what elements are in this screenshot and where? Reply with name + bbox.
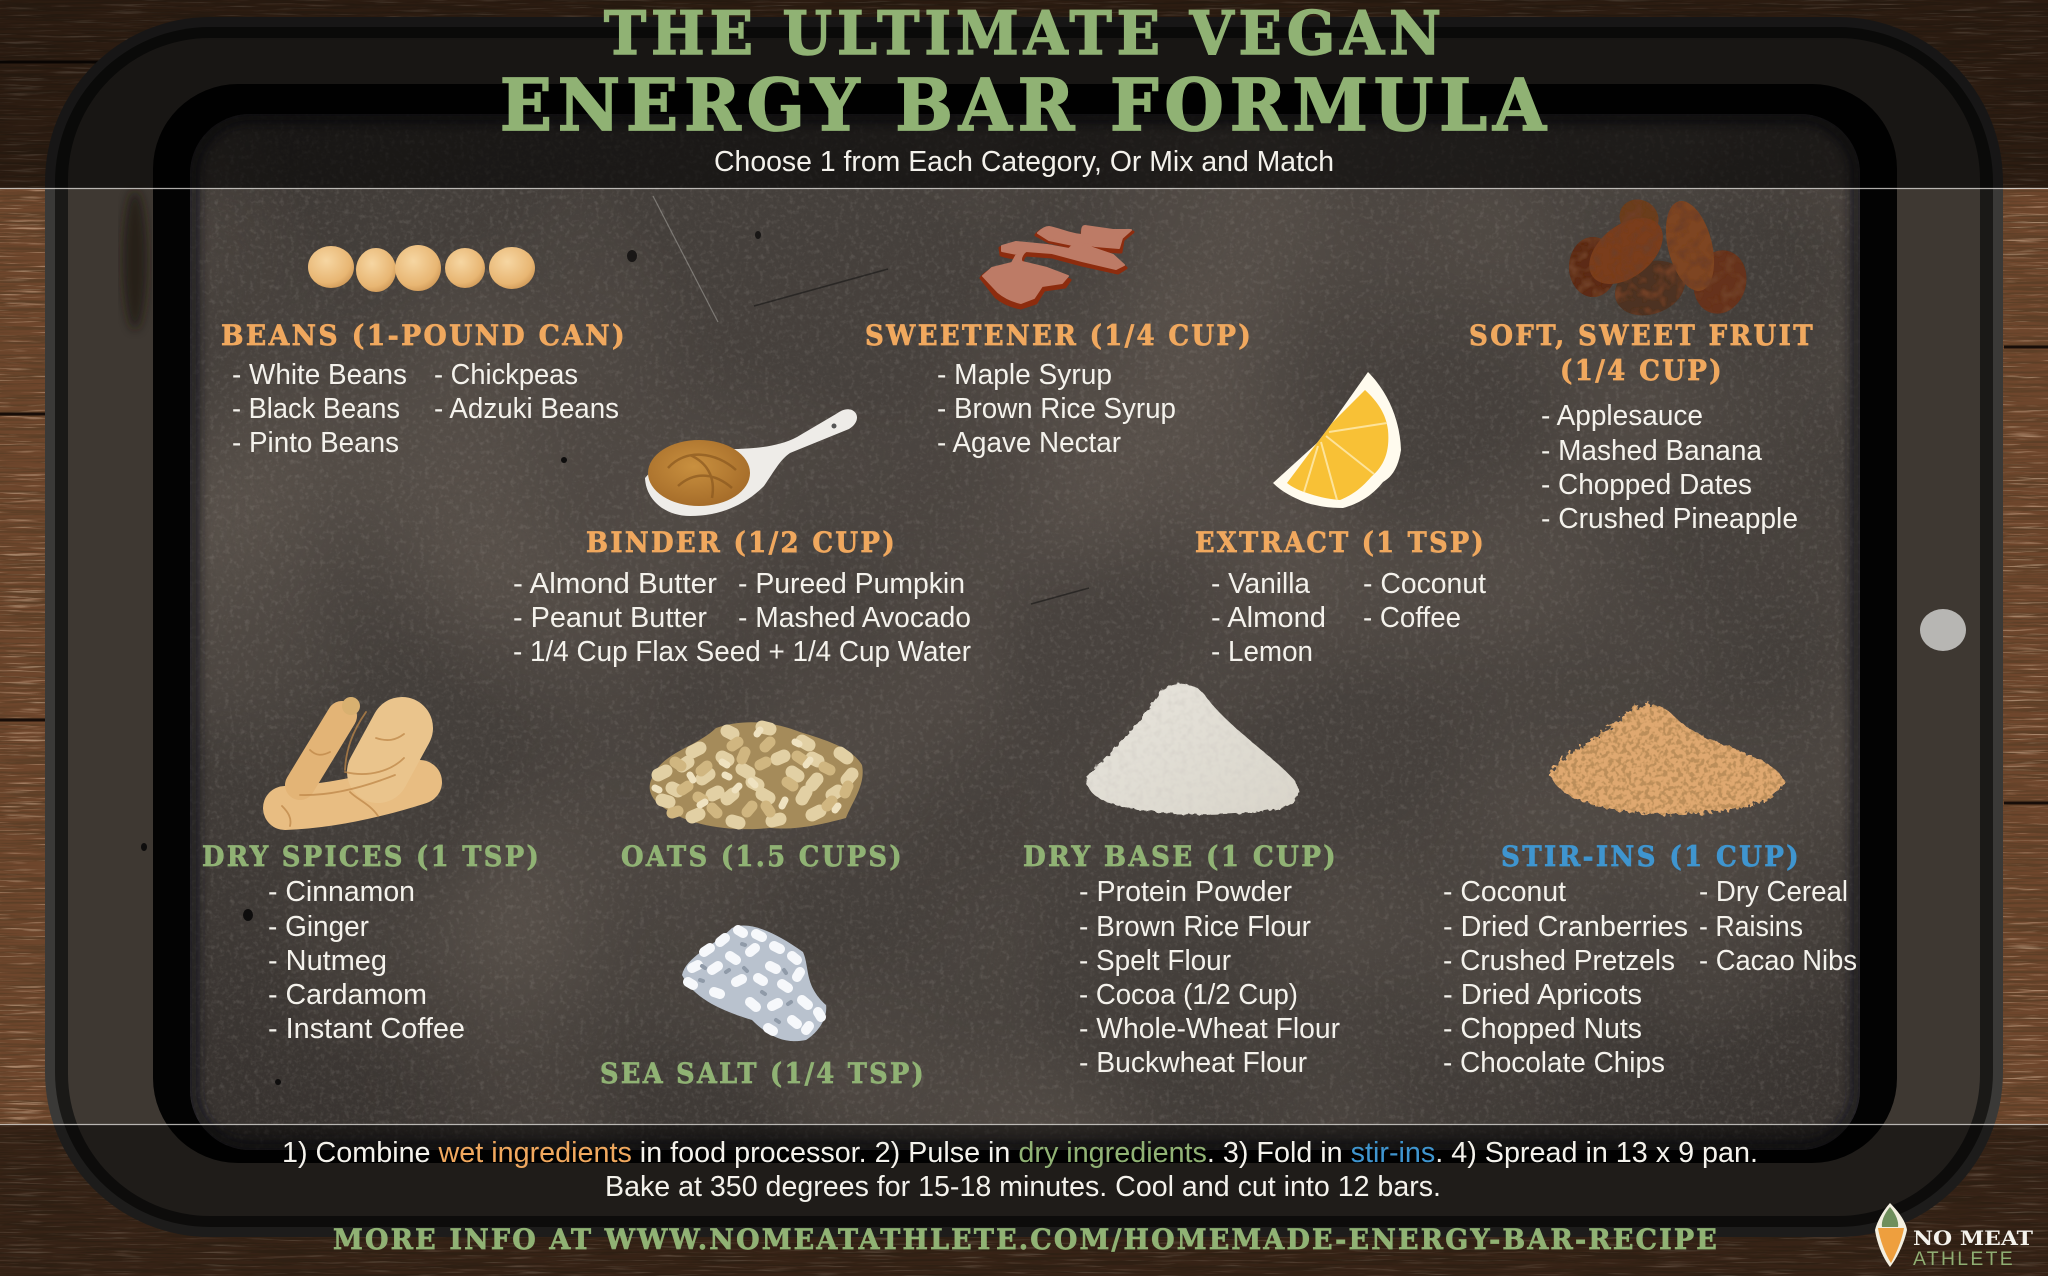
list: dry spices	[268, 876, 465, 1045]
list: dry base: - Brown Rice Flour	[1079, 911, 1311, 943]
list: dry spices: - Instant Coffee	[268, 1013, 465, 1045]
list: dry base: - Buckwheat Flour	[1079, 1047, 1307, 1079]
list: stir-ins: - Chopped Nuts	[1443, 1013, 1642, 1045]
list: stir-ins: - Coconut	[1443, 876, 1566, 908]
panel: sweetener	[865, 226, 1253, 459]
list: binder: - Mashed Avocado	[738, 602, 971, 634]
logo: No Meat Athlete: ATHLETE	[1913, 1249, 2015, 1270]
logo: No Meat Athlete: NO MEAT	[1913, 1226, 2033, 1250]
list: binder: - Pureed Pumpkin	[738, 568, 965, 600]
list: stir-ins: - Cacao Nibs	[1699, 945, 1857, 977]
list: soft sweet fruit: - Mashed Banana	[1541, 435, 1763, 467]
footer link: MORE INFO AT WWW.NOMEATATHLETE.COM/HOMEMADE-ENERGY-BAR-RECIPE	[333, 1223, 1719, 1256]
heading: soft sweet fruit	[1469, 319, 1815, 387]
icon: ginger root	[282, 697, 420, 826]
icon: crumbled pile	[1550, 705, 1784, 814]
list: soft sweet fruit	[1541, 400, 1798, 535]
list: binder: - Peanut Butter	[513, 602, 707, 634]
list: dry base: - Spelt Flour	[1079, 945, 1231, 977]
list: dry spices: - Ginger	[268, 911, 369, 943]
list: stir-ins	[1443, 876, 1857, 1079]
panel: dry spices	[202, 697, 541, 1045]
list: dry spices: - Cinnamon	[268, 876, 415, 908]
heading: extract: EXTRACT (1 TSP)	[1195, 526, 1486, 559]
heading: stir-ins: STIR-INS (1 CUP)	[1501, 840, 1801, 873]
heading: binder: BINDER (1/2 CUP)	[586, 526, 897, 559]
header band	[0, 0, 2048, 188]
logo: No Meat Athlete	[1875, 1203, 2033, 1270]
list: dry base: - Whole-Wheat Flour	[1079, 1013, 1340, 1045]
list: beans: - Black Beans	[232, 393, 400, 425]
subtitle: Choose 1 from Each Category, Or Mix and Match	[714, 146, 1334, 178]
list: stir-ins: - Dried Apricots	[1443, 979, 1642, 1011]
icon: flour pile	[1087, 683, 1298, 815]
list: sweetener	[937, 359, 1176, 459]
title: THE ULTIMATE VEGAN	[604, 0, 1446, 69]
heading: soft sweet fruit: (1/4 CUP)	[1560, 354, 1724, 387]
list: extract: - Coffee	[1363, 602, 1461, 634]
heading: sweetener: SWEETENER (1/4 CUP)	[865, 319, 1253, 352]
instructions: Bake at 350 degrees for 15-18 minutes. Cool and cut into 12 bars.	[605, 1171, 1441, 1203]
icon: tray hanging hole	[1920, 609, 1966, 651]
list: dry base: - Cocoa (1/2 Cup)	[1079, 979, 1298, 1011]
icon: chickpeas	[308, 245, 535, 292]
list: stir-ins: - Crushed Pretzels	[1443, 945, 1675, 977]
list: stir-ins: - Dried Cranberries	[1443, 911, 1688, 943]
heading: dry base: DRY BASE (1 CUP)	[1023, 840, 1338, 873]
heading: oats: OATS (1.5 CUPS)	[621, 840, 904, 873]
icon: dates	[1569, 192, 1753, 325]
title	[500, 0, 1552, 147]
panel: sea salt	[600, 925, 926, 1090]
icon: salt crystals	[682, 925, 826, 1041]
list: dry spices: - Cardamom	[268, 979, 427, 1011]
list: dry base: - Protein Powder	[1079, 876, 1292, 908]
list: dry spices: - Nutmeg	[268, 945, 387, 977]
list: sweetener: - Agave Nectar	[937, 427, 1121, 459]
icon: rolled oats	[650, 722, 863, 829]
footer band	[0, 1125, 2048, 1276]
list: beans: - Pinto Beans	[232, 427, 399, 459]
list: beans	[232, 359, 619, 459]
list: extract: - Almond	[1211, 602, 1326, 634]
heading: dry spices: DRY SPICES (1 TSP)	[202, 840, 541, 873]
list: stir-ins: - Chocolate Chips	[1443, 1047, 1665, 1079]
list: beans: - Adzuki Beans	[434, 393, 619, 425]
list: soft sweet fruit: - Crushed Pineapple	[1541, 503, 1798, 535]
list: soft sweet fruit: - Applesauce	[1541, 400, 1703, 432]
list: sweetener: - Brown Rice Syrup	[937, 393, 1176, 425]
list: stir-ins: - Dry Cereal	[1699, 876, 1848, 908]
panel: soft sweet fruit	[1469, 192, 1815, 535]
instructions	[282, 1137, 1758, 1203]
list: sweetener: - Maple Syrup	[937, 359, 1112, 391]
title: ENERGY BAR FORMULA	[500, 63, 1552, 147]
heading: beans: BEANS (1-POUND CAN)	[221, 319, 627, 352]
list: extract	[1211, 568, 1486, 668]
icon: lemon wedge	[1273, 372, 1401, 508]
heading: soft sweet fruit: SOFT, SWEET FRUIT	[1469, 319, 1815, 352]
icon: spoon of peanut butter	[645, 409, 857, 516]
list: binder: - 1/4 Cup Flax Seed + 1/4 Cup Water	[513, 636, 971, 668]
instructions: 1) Combine wet ingredients in food processor. 2) Pulse in dry ingredients. 3) Fold in stir-ins. 4) Spread in 13 x 9 pan.	[282, 1137, 1758, 1169]
panel: binder	[513, 409, 971, 668]
panel: stir-ins	[1443, 705, 1857, 1079]
list: soft sweet fruit: - Chopped Dates	[1541, 469, 1752, 501]
panel: oats	[621, 722, 904, 873]
panel: extract	[1195, 372, 1486, 668]
list: binder	[513, 568, 971, 668]
list: beans: - Chickpeas	[434, 359, 578, 391]
list: dry base	[1079, 876, 1340, 1079]
icon: syrup drizzle	[981, 226, 1133, 308]
heading: sea salt: SEA SALT (1/4 TSP)	[600, 1057, 926, 1090]
list: beans: - White Beans	[232, 359, 407, 391]
list: binder: - Almond Butter	[513, 568, 717, 600]
list: stir-ins: - Raisins	[1699, 911, 1803, 943]
list: extract: - Vanilla	[1211, 568, 1311, 600]
list: extract: - Coconut	[1363, 568, 1486, 600]
panel: dry base	[1023, 683, 1340, 1079]
panel: beans	[221, 245, 627, 459]
list: extract: - Lemon	[1211, 636, 1313, 668]
icon: carrot	[1875, 1203, 1907, 1267]
